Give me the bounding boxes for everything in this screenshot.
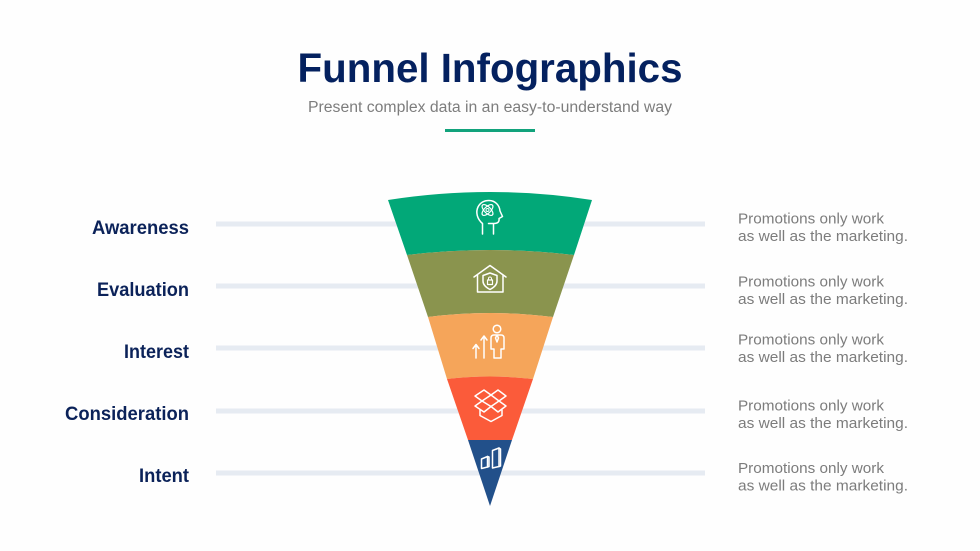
funnel segment: consideration bbox=[447, 376, 533, 440]
title underline bbox=[445, 129, 535, 132]
description: row 1: Promotions only work bbox=[738, 210, 885, 228]
description: row 5 bbox=[738, 460, 908, 494]
row connector lines bbox=[216, 222, 705, 476]
funnel segment: intent bbox=[468, 440, 512, 506]
subtitle: Present complex data in an easy-to-understand way bbox=[308, 99, 672, 116]
icon: bar blocks bbox=[482, 448, 500, 468]
funnel segment: interest bbox=[428, 313, 553, 379]
icon: house with shield bbox=[474, 266, 506, 292]
icon: head with atom bbox=[477, 200, 502, 234]
description: row 3: as well as the marketing. bbox=[738, 349, 908, 366]
icon: open box bbox=[475, 390, 506, 422]
description: row 4: as well as the marketing. bbox=[738, 415, 908, 432]
title: Funnel Infographics bbox=[298, 45, 682, 91]
label: Evaluation: Evaluation bbox=[97, 280, 189, 301]
description: row 4 bbox=[738, 398, 908, 432]
description: row 3 bbox=[738, 332, 908, 366]
icon: person with growth arrows bbox=[473, 325, 504, 358]
description: row 3: Promotions only work bbox=[738, 332, 885, 348]
description: row 5: as well as the marketing. bbox=[738, 478, 908, 494]
label: Awareness: Awareness bbox=[92, 218, 189, 239]
label: Intent: Intent bbox=[139, 466, 190, 487]
description: row 2: as well as the marketing. bbox=[738, 291, 908, 308]
funnel chart bbox=[388, 192, 592, 506]
description: row 2 bbox=[738, 274, 908, 308]
description: row 1: as well as the marketing. bbox=[738, 228, 908, 245]
description: row 5: Promotions only work bbox=[738, 460, 885, 477]
label: Interest: Interest bbox=[124, 342, 190, 363]
funnel segment: awareness bbox=[388, 192, 592, 255]
label: Consideration: Consideration bbox=[65, 404, 189, 425]
description: row 1 bbox=[738, 210, 908, 245]
description: row 2: Promotions only work bbox=[738, 274, 885, 290]
description: row 4: Promotions only work bbox=[738, 398, 885, 414]
funnel segment: evaluation bbox=[407, 250, 574, 317]
